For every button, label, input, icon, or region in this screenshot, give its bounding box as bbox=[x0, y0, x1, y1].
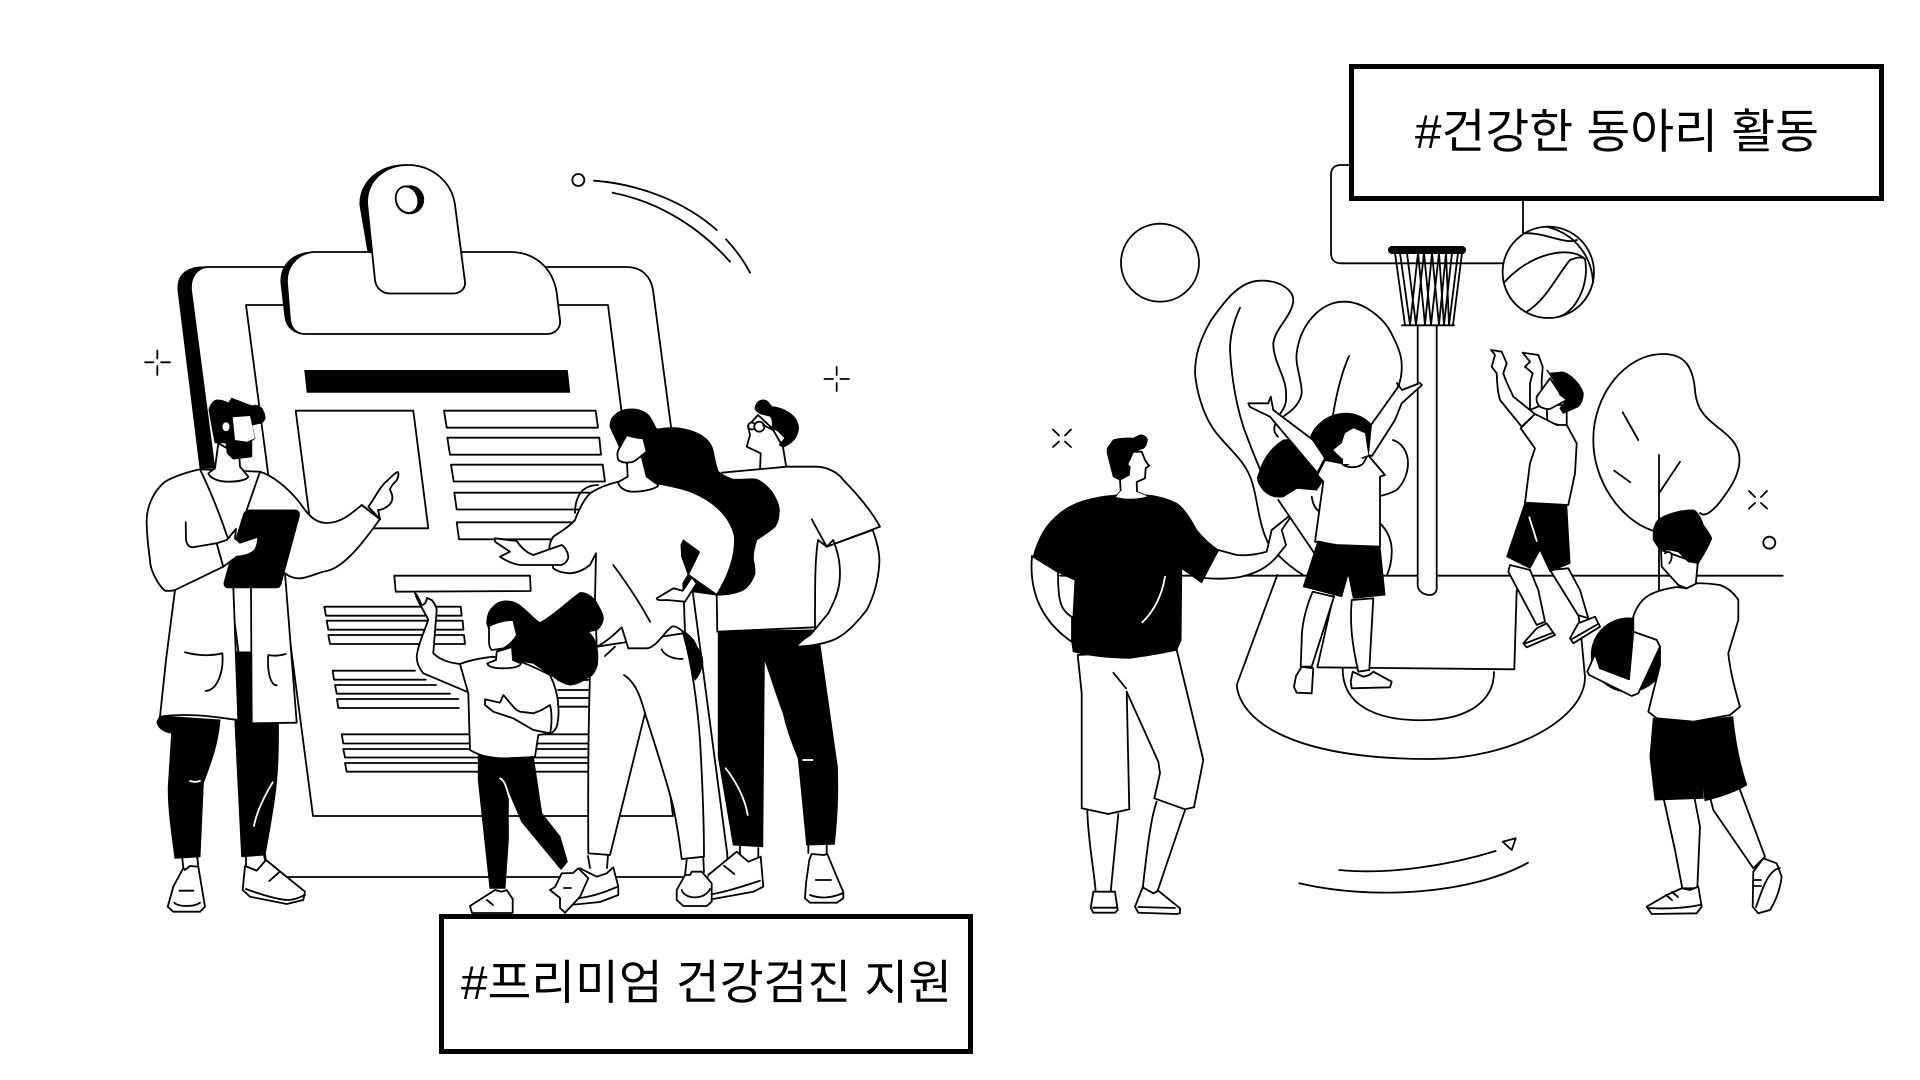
shoe right bbox=[1135, 887, 1180, 914]
right leg bbox=[1351, 598, 1373, 672]
hair bbox=[755, 400, 798, 447]
paper sheet bbox=[246, 305, 673, 816]
text rows right bbox=[444, 411, 611, 539]
face bbox=[747, 415, 787, 470]
shirt bbox=[1521, 414, 1577, 505]
hair bbox=[1547, 370, 1583, 413]
legs bbox=[1087, 802, 1185, 892]
shoe right bbox=[805, 845, 843, 903]
rim bbox=[1388, 246, 1466, 254]
figure: man in black shirt bbox=[1032, 435, 1290, 914]
hand on hip bbox=[657, 577, 697, 602]
ground line bbox=[1060, 575, 1783, 577]
motion arcs bottom bbox=[1299, 851, 1528, 893]
front leg bbox=[1663, 797, 1700, 888]
face bbox=[617, 435, 647, 463]
ear bbox=[222, 422, 230, 431]
left trouser leg bbox=[157, 716, 220, 858]
shadow sliver bbox=[682, 630, 703, 680]
icon: triangle bbox=[1503, 838, 1516, 850]
clipboard board bbox=[191, 267, 727, 877]
shoe right bbox=[550, 868, 588, 913]
caption box: health check: #프리미엄 건강검진 지원 bbox=[461, 956, 952, 1009]
neck bbox=[1547, 405, 1567, 427]
long hair bbox=[610, 409, 779, 595]
neck and collar bbox=[208, 443, 248, 482]
figure: centre girl bbox=[1248, 383, 1422, 693]
jump shoe 2 bbox=[1570, 617, 1600, 643]
arm 1 bbox=[1491, 350, 1535, 427]
figure: doctor bbox=[147, 398, 398, 912]
board shadow bbox=[178, 267, 214, 468]
backboard bbox=[1331, 165, 1523, 263]
black t-shirt bbox=[1033, 495, 1218, 658]
gap at elbow bbox=[681, 540, 699, 575]
face bbox=[1537, 378, 1567, 409]
forearm bbox=[1587, 632, 1660, 696]
court lines bbox=[1237, 575, 1585, 759]
figure: woman with long hair bbox=[495, 409, 779, 906]
raised arm bbox=[415, 593, 468, 692]
left leg bbox=[1301, 592, 1334, 667]
trouser highlights bbox=[726, 760, 812, 815]
ear bbox=[1665, 552, 1672, 563]
net bbox=[1395, 253, 1462, 325]
figure: girl bbox=[415, 593, 603, 913]
shirt bbox=[1315, 455, 1385, 547]
right trouser leg bbox=[235, 652, 278, 857]
image placeholder bbox=[296, 411, 428, 528]
pockets bbox=[185, 652, 286, 691]
pole bbox=[1418, 325, 1437, 595]
icon: star left bbox=[1053, 430, 1071, 447]
title bar bbox=[304, 370, 570, 393]
illustration: basketball court bbox=[1060, 165, 1783, 759]
lab coat bbox=[147, 469, 380, 723]
icon: star right bbox=[1749, 491, 1767, 508]
arm behind bbox=[575, 485, 598, 513]
shorts bbox=[1507, 503, 1570, 572]
arm 2 bbox=[1523, 353, 1543, 410]
hair and beard bbox=[209, 398, 265, 459]
left shoe bbox=[1294, 667, 1313, 693]
ball bbox=[1591, 618, 1666, 692]
icon: sparkle right bbox=[824, 367, 849, 391]
trouser highlights bbox=[190, 781, 273, 826]
cuff bbox=[362, 505, 380, 519]
clip base bbox=[281, 252, 560, 334]
highlight bbox=[500, 778, 509, 797]
neck bbox=[618, 457, 658, 492]
motion arcs with circle bbox=[572, 174, 750, 273]
girl hair bbox=[487, 593, 603, 685]
right arm bbox=[1203, 517, 1290, 579]
shoe left bbox=[560, 855, 618, 905]
second leg bbox=[1550, 568, 1588, 618]
text rows lower bbox=[324, 607, 590, 772]
neck and head bbox=[1661, 550, 1698, 588]
face redraw bbox=[490, 621, 516, 649]
back arm bbox=[1032, 556, 1072, 642]
shoe lace bbox=[487, 888, 571, 905]
sun circle bbox=[1121, 224, 1199, 302]
caption box: healthy club bbox=[1352, 66, 1882, 198]
illustration: clipboard bbox=[178, 165, 727, 877]
sleeve line bbox=[812, 519, 827, 547]
centre heading bar bbox=[394, 576, 531, 592]
back leg bbox=[1710, 788, 1765, 868]
shorts bbox=[1650, 717, 1747, 801]
neck bbox=[1343, 458, 1362, 464]
sleeve cuff line bbox=[688, 575, 717, 595]
free throw box bbox=[1317, 590, 1517, 669]
icon: sparkle left bbox=[145, 350, 170, 375]
collar bbox=[1116, 491, 1147, 499]
face bbox=[233, 416, 255, 442]
inner sleeve line bbox=[186, 522, 223, 567]
arm bbox=[796, 530, 879, 647]
trousers bbox=[718, 630, 838, 847]
hair bbox=[1258, 413, 1377, 497]
hand across bbox=[485, 695, 552, 733]
tablet bbox=[224, 510, 299, 588]
legs bbox=[1508, 565, 1545, 625]
top bbox=[549, 482, 735, 648]
jump shoe 1 bbox=[1523, 623, 1555, 647]
body crease bbox=[605, 565, 683, 659]
shoe left bbox=[708, 846, 763, 899]
glasses bbox=[748, 422, 773, 432]
sleeve bottom edge bbox=[175, 567, 223, 590]
hair bbox=[1653, 510, 1712, 563]
holding hand bbox=[217, 529, 258, 567]
tree small lobes bbox=[1312, 440, 1408, 575]
hair bbox=[1107, 435, 1147, 480]
figure: man with glasses bbox=[708, 400, 880, 903]
shirt bbox=[717, 467, 880, 632]
shirt bbox=[1633, 583, 1740, 722]
trousers bbox=[588, 633, 704, 859]
caption box: health check bbox=[442, 916, 970, 1052]
tree middle vein bbox=[1333, 356, 1349, 417]
tree right trunk and marks bbox=[1614, 412, 1680, 590]
coat gap lower black bbox=[236, 652, 252, 722]
shoe front bbox=[1647, 887, 1702, 914]
key arc bbox=[1343, 668, 1494, 720]
arm and hand bbox=[495, 538, 568, 565]
shirt bbox=[460, 657, 559, 758]
shorts bbox=[1078, 650, 1203, 814]
lapels bbox=[200, 469, 260, 537]
doctor shoe right bbox=[243, 855, 305, 904]
face bbox=[489, 620, 517, 650]
crotch line bbox=[1113, 673, 1126, 688]
caption box: healthy club: #건강한 동아리 활동 bbox=[1415, 105, 1819, 158]
tree left vein bbox=[1230, 308, 1317, 575]
tree right bbox=[1593, 354, 1739, 531]
face bbox=[1333, 428, 1368, 462]
shoe left bbox=[470, 890, 513, 913]
raised left arm bbox=[1248, 397, 1325, 473]
shoe left bbox=[1091, 892, 1118, 913]
pointing hand bbox=[368, 472, 398, 519]
basketball bbox=[1503, 227, 1594, 318]
icon: small circle bbox=[1763, 537, 1775, 549]
shirt highlight bbox=[1142, 577, 1165, 622]
shoe right bbox=[677, 858, 712, 906]
shorts stripe bbox=[1529, 517, 1537, 541]
figure: boy with ball bbox=[1587, 510, 1782, 914]
neck and face bbox=[1116, 452, 1149, 499]
tree middle bbox=[1283, 302, 1402, 417]
clip tab bbox=[360, 165, 465, 294]
neck collar bbox=[487, 647, 521, 668]
shorts bbox=[1303, 541, 1385, 598]
trousers inner line bbox=[624, 675, 645, 713]
shoe back bbox=[1753, 858, 1782, 913]
tree left bbox=[1195, 281, 1293, 547]
doctor shoe left bbox=[168, 857, 205, 912]
right shoe bbox=[1351, 672, 1392, 688]
figure: jumping boy bbox=[1491, 350, 1600, 647]
raised right arm bbox=[1368, 383, 1422, 456]
leggings bbox=[478, 755, 567, 888]
